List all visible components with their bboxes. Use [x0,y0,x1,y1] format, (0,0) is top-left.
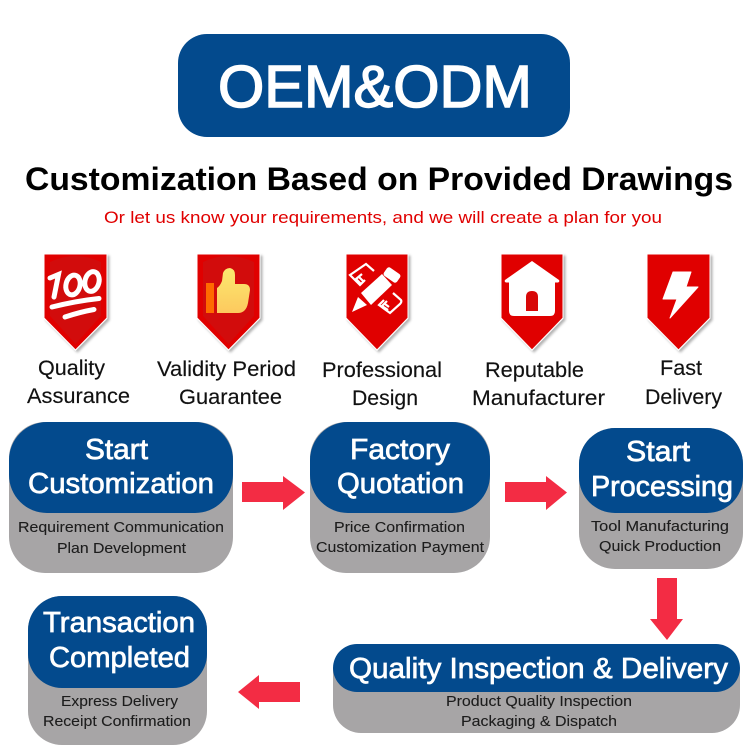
panel: start processing: Start [626,436,690,468]
icon: thumbs up badge [197,254,260,350]
panel: factory quotation: Factory [350,434,451,466]
panel: factory quotation [310,422,490,573]
label: fast delivery [645,357,722,409]
panel: start customization: Plan Development [57,540,187,557]
icon: lightning badge [647,254,710,350]
title banner: OEM&ODM [218,54,532,120]
panel: factory quotation: Customization Payment [316,539,485,556]
label: validity period guarantee: Validity Period [157,358,296,381]
label: reputable manufacturer: Reputable [485,359,584,382]
label: professional design [322,359,442,410]
panel: transaction completed [28,596,207,745]
label: quality assurance [27,357,130,408]
panel: factory quotation: Quotation [337,468,464,500]
panel: start processing: Quick Production [599,538,721,555]
arrow: step 3 to 4 [650,578,683,640]
panel: factory quotation: Price Confirmation [334,519,465,536]
panel: start customization [9,422,233,573]
label: fast delivery: Fast [660,357,702,380]
label: professional design: Design [352,387,418,410]
panel: quality inspection and delivery [333,644,740,733]
panel: start processing [579,428,743,569]
label: reputable manufacturer: Manufacturer [472,387,605,410]
panel: start processing: Tool Manufacturing [591,518,729,535]
panel: transaction completed: Express Delivery [61,693,179,710]
arrow: step 1 to 2 [242,476,305,510]
subtitle: Or let us know your requirements, and we will create a plan for you [104,208,662,227]
arrow: step 4 to 5 [238,675,300,709]
heading: Customization Based on Provided Drawings [25,161,733,197]
label: validity period guarantee: Guarantee [179,386,282,409]
panel: quality inspection and delivery: Packaging & Dispatch [461,713,617,730]
title banner [178,34,570,137]
label: professional design: Professional [322,359,442,382]
label: reputable manufacturer [472,359,605,410]
arrow: step 2 to 3 [505,476,567,510]
label: quality assurance: Quality [38,357,106,380]
panel: start processing: Processing [591,471,733,503]
icon: house badge [501,254,563,350]
panel: transaction completed: Completed [49,642,190,674]
icon: quality 100 badge [44,254,107,350]
panel: start customization: Requirement Communication [18,519,224,536]
panel: transaction completed: Transaction [43,607,195,639]
panel: quality inspection and delivery: Product Quality Inspection [446,693,632,710]
panel: transaction completed: Receipt Confirmation [43,713,191,730]
label: quality assurance: Assurance [27,385,130,408]
panel: start customization: Start [85,434,148,466]
panel: quality inspection and delivery: Quality Inspection & Delivery [349,653,729,685]
label: validity period guarantee [157,358,296,409]
panel: start customization: Customization [28,468,214,500]
label: fast delivery: Delivery [645,386,722,409]
icon: pencil design badge [346,254,408,350]
